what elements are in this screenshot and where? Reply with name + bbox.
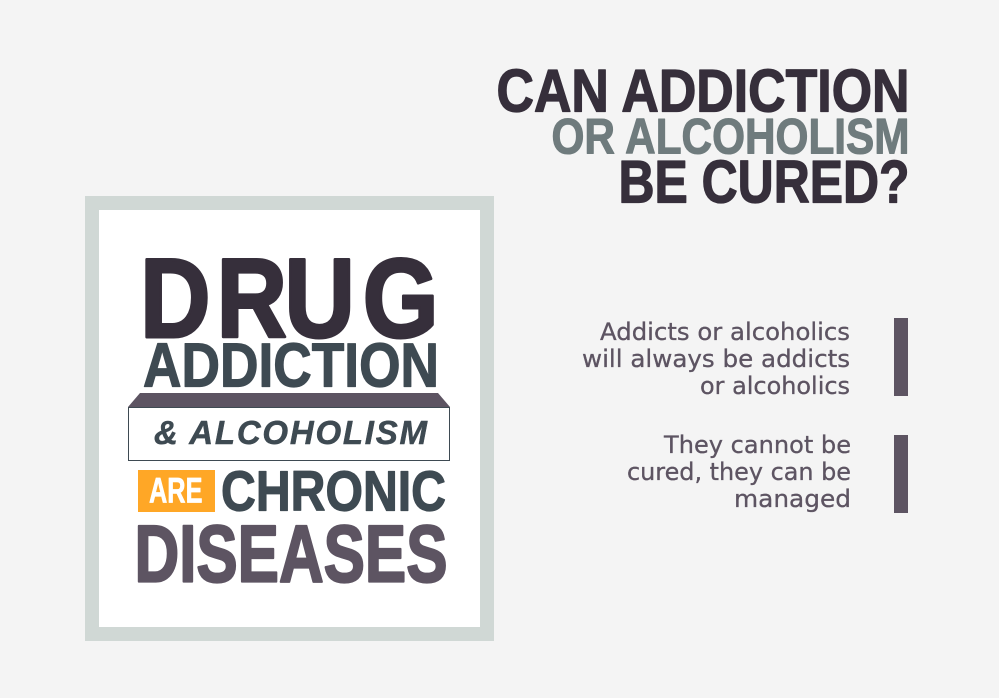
text block: addicts or alcoholics <box>582 318 850 400</box>
accent bar: first statement <box>894 318 908 396</box>
heading: addiction: ADDICTION <box>143 332 439 400</box>
text block: cannot be cured: They cannot be <box>663 431 851 459</box>
banner: alcoholism box with roof <box>128 393 450 460</box>
title: can addiction or alcoholism be cured: CAN ADDICTION <box>496 58 910 124</box>
text block: cannot be cured: managed <box>734 485 851 513</box>
heading: diseases: DISEASES <box>134 510 448 600</box>
badge: are: ARE <box>149 472 202 510</box>
text block: addicts or alcoholics: Addicts or alcoholics <box>600 318 850 346</box>
heading: chronic: CHRONIC <box>221 460 446 524</box>
accent bar: second statement <box>894 435 908 513</box>
heading: drug: DRUG <box>140 237 439 362</box>
text block: cannot be cured <box>627 431 851 513</box>
text block: cannot be cured: cured, they can be <box>627 458 851 486</box>
panel: framed typographic statement <box>92 203 487 634</box>
title: can addiction or alcoholism be cured: BE CURED? <box>618 148 910 216</box>
text block: addicts or alcoholics: or alcoholics <box>700 372 850 400</box>
title: can addiction or alcoholism be cured <box>496 58 910 216</box>
banner: alcoholism box with roof: & ALCOHOLISM <box>154 414 428 451</box>
title: can addiction or alcoholism be cured: OR ALCOHOLISM <box>552 108 910 164</box>
text block: addicts or alcoholics: will always be addicts <box>582 345 850 373</box>
